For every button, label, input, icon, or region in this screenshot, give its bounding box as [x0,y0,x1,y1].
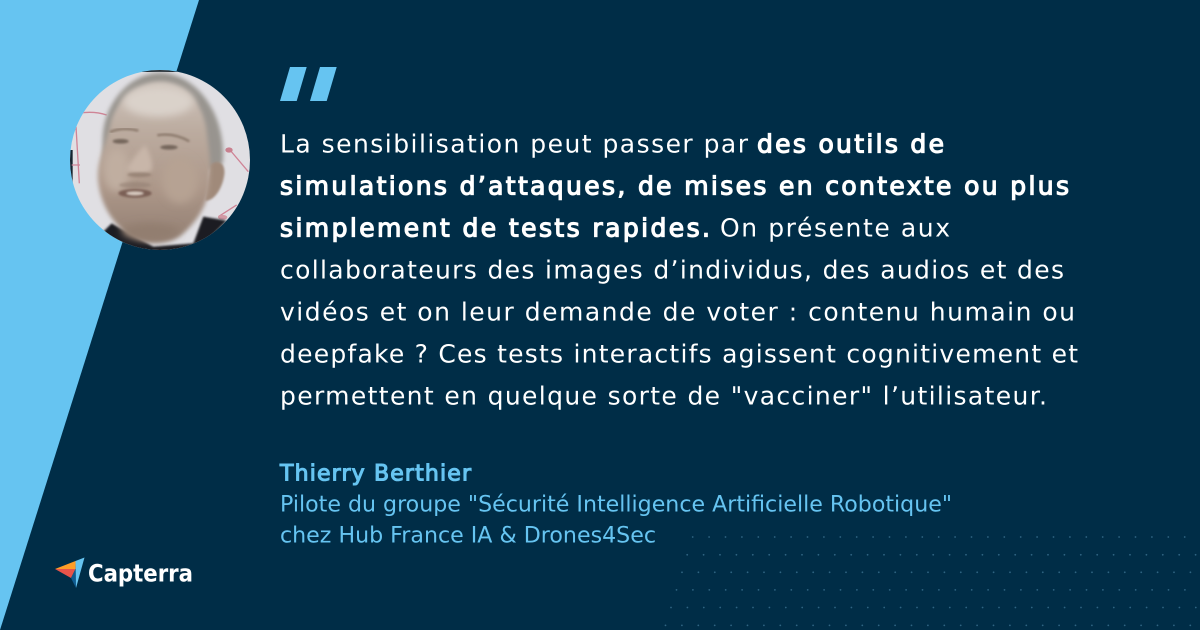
author attribution: chez Hub France IA & Drones4Sec [280,524,656,548]
light blue diagonal band [0,0,199,630]
quote text [280,130,1078,411]
portrait photo of Thierry Berthier [70,70,250,257]
quotation mark [280,67,337,101]
author attribution [279,462,952,548]
quote text: deepfake ? Ces tests interactifs agissent cognitivement et [280,340,1078,369]
dot pattern [665,536,1197,626]
quote text: La sensibilisation peut passer par [280,130,749,159]
logo wordmark: Capterra [88,560,193,588]
quote text: des outils de [757,130,944,159]
Capterra logo [55,558,193,588]
quote text: simplement de tests rapides. [280,214,710,243]
quote text: collaborateurs des images d’individus, des audios et des [280,256,1064,285]
quote text: On présente aux [720,214,950,243]
icon: Capterra arrow [55,558,84,588]
quote text: vidéos et on leur demande de voter : contenu humain ou [280,298,1075,327]
quote text: permettent en quelque sorte de "vacciner" l’utilisateur. [280,382,1047,411]
author attribution: Thierry Berthier [279,462,472,486]
author attribution: Pilote du groupe "Sécurité Intelligence Artificielle Robotique" [280,492,952,518]
quote text: simulations d’attaques, de mises en contexte ou plus [280,172,1069,201]
